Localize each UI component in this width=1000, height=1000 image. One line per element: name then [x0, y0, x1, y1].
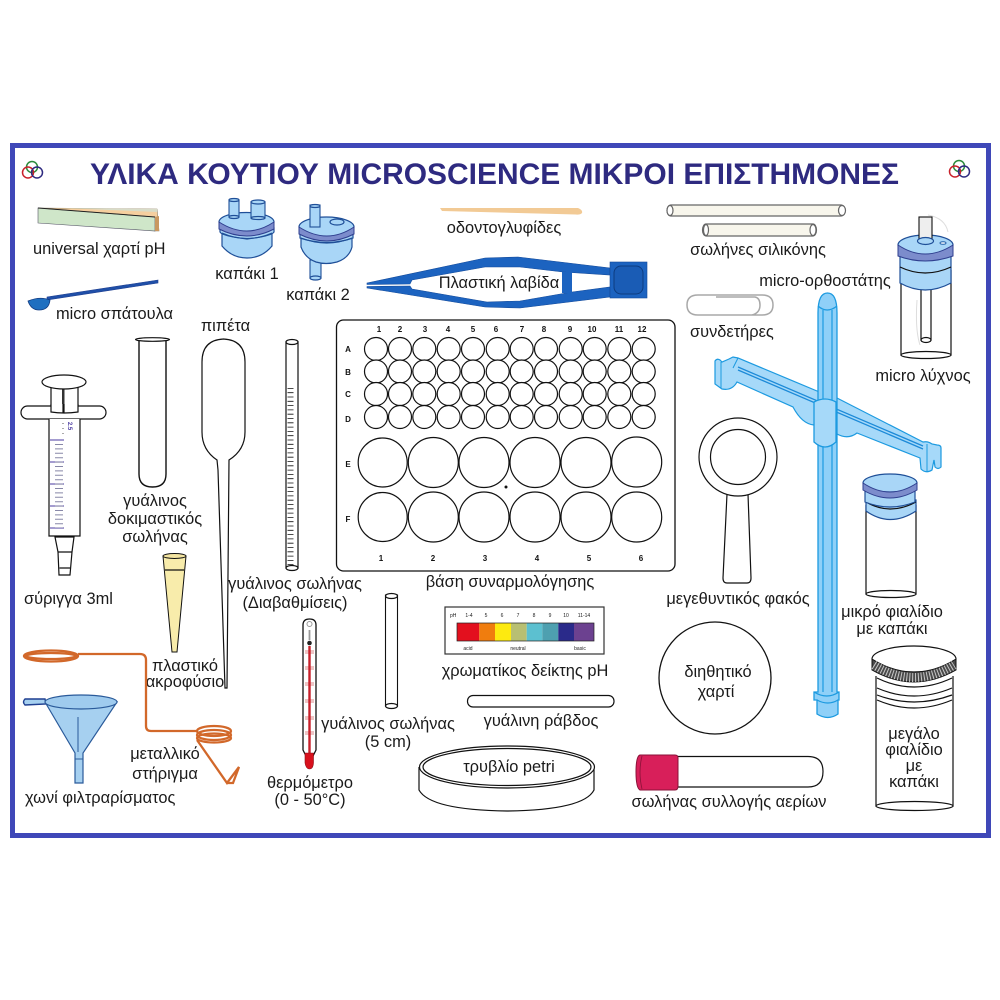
label: metal support: στήριγμα: [132, 765, 198, 783]
plate column numbers: 2: [398, 325, 403, 334]
icon: 5 cm glass tube: [386, 594, 398, 708]
icon: petri dish: [419, 746, 594, 811]
panel: blue frame: [12, 146, 988, 836]
plate bottom numbers: 1: [379, 554, 384, 563]
plate: assembly base: [336, 320, 675, 571]
icon: thermometer: [303, 619, 316, 769]
icon: magnifying glass: [699, 418, 777, 583]
icon: metal support wire: [24, 650, 239, 783]
pH scale words: [463, 646, 586, 652]
label: test tube: [108, 492, 202, 546]
icon: silicone tubes: [667, 205, 846, 236]
icon: plastic tip: [163, 554, 186, 652]
plate bottom numbers: 3: [483, 554, 488, 563]
label: large vial: μεγάλο: [888, 725, 940, 743]
plate bottom numbers: 6: [639, 554, 644, 563]
plate column numbers: 6: [494, 325, 499, 334]
label: pH indicator: χρωματίκος δείκτης pH: [442, 662, 608, 680]
plate row letters: E: [345, 460, 351, 469]
label: thermometer: (0 - 50°C): [274, 791, 346, 809]
icon: plastic tweezers: [367, 257, 647, 308]
plate row letters: C: [345, 390, 351, 399]
plate column numbers: 1: [377, 325, 382, 334]
plate row letters: D: [345, 415, 351, 424]
plate large wells: [358, 437, 662, 542]
label: metal support: [130, 745, 200, 783]
label: plastic tip: ακροφύσιο: [146, 673, 224, 691]
pH scale numbers: 1-4: [465, 613, 473, 619]
plate column numbers: [377, 325, 647, 334]
label: toothpicks: οδοντογλυφίδες: [447, 219, 561, 237]
plate row letters: B: [345, 368, 351, 377]
pH scale numbers: 9: [549, 613, 552, 619]
label: syringe: σύριγγα 3ml: [24, 590, 113, 608]
plate column numbers: 5: [471, 325, 476, 334]
label: assembly base: βάση συναρμολόγησης: [426, 573, 594, 591]
plate column numbers: 7: [520, 325, 525, 334]
icon: logo right: [950, 160, 970, 177]
pH scale numbers: 5: [485, 613, 488, 619]
label: test tube: γυάλινος: [123, 492, 187, 510]
label: plastic tip: [146, 657, 224, 691]
label: large vial: καπάκι: [889, 773, 939, 791]
plate bottom numbers: 5: [587, 554, 592, 563]
label: graduated tube: [228, 575, 362, 612]
label: 5 cm glass tube: [321, 715, 455, 751]
label: filter paper: διηθητικό: [684, 663, 752, 681]
label: filter paper: [684, 663, 752, 701]
plate row letters: F: [346, 515, 351, 524]
plate column numbers: 12: [638, 325, 647, 334]
plate column numbers: 3: [423, 325, 428, 334]
icon: paper clip: [687, 295, 773, 315]
label: micro burner: micro λύχνος: [875, 367, 971, 385]
label: small vial: μικρό φιαλίδιο: [841, 603, 943, 621]
label: large vial: [885, 725, 943, 791]
icon: small vial: [863, 474, 917, 598]
icon: funnel: [24, 695, 117, 783]
icon: large vial: [872, 646, 956, 810]
pH scale numbers: 10: [563, 613, 569, 619]
icon: gas collection tube: [636, 755, 823, 790]
pH scale numbers: [450, 613, 590, 619]
label: small vial: [841, 603, 943, 638]
plate row letters: A: [345, 345, 351, 354]
label: magnifying glass: μεγεθυντικός φακός: [666, 590, 810, 608]
title: ΥΛΙΚΑ ΚΟΥΤΙΟΥ MICROSCIENCE ΜΙΚΡΟΙ ΕΠΙΣΤΗΜΟΝΕΣ: [90, 158, 899, 191]
label: plastic tip: πλαστικό: [152, 657, 218, 675]
icon: micro spatula: [28, 280, 158, 310]
label: small vial: με καπάκι: [856, 620, 928, 638]
plate bottom numbers: 2: [431, 554, 436, 563]
label: gas collection tube: σωλήνας συλλογής αερίων: [632, 793, 826, 811]
pH scale words: neutral: [510, 646, 526, 652]
label: universal pH paper: universal χαρτί pH: [33, 240, 166, 258]
label: paper clips: συνδετήρες: [690, 323, 774, 341]
label: thermometer: [267, 774, 353, 809]
icon: logo left: [22, 162, 42, 178]
plate column numbers: 10: [588, 325, 597, 334]
icon: pipette: [202, 339, 245, 688]
label: test tube: δοκιμαστικός: [108, 510, 202, 528]
plate row letters: [345, 345, 351, 524]
icon: cap 1: [219, 198, 274, 258]
label: glass rod: γυάλινη ράβδος: [484, 712, 598, 730]
plate column numbers: 4: [446, 325, 451, 334]
label: graduated tube: γυάλινος σωλήνας: [228, 575, 362, 593]
chart: pH colour indicator: [445, 607, 604, 654]
plate column numbers: 9: [568, 325, 573, 334]
label: 5 cm glass tube: (5 cm): [365, 733, 411, 751]
label: cap 1: καπάκι 1: [215, 265, 279, 283]
label: plastic tweezers: Πλαστική λαβίδα: [439, 274, 559, 292]
icon: micro burner: [898, 215, 953, 358]
label: graduated tube: (Διαβαθμίσεις): [242, 594, 348, 612]
icon: filter paper: [659, 622, 771, 734]
icon: stand: [715, 293, 941, 718]
pH scale numbers: 8: [533, 613, 536, 619]
plate column numbers: 11: [615, 325, 624, 334]
icon: test tube rim: [136, 338, 170, 341]
plate bottom numbers: [379, 554, 644, 563]
icon: graduated glass tube: [286, 340, 298, 570]
icon: toothpick: [440, 208, 582, 215]
pH scale words: basic: [574, 646, 586, 652]
plate column numbers: 8: [542, 325, 547, 334]
plate bottom numbers: 4: [535, 554, 540, 563]
label: thermometer: θερμόμετρο: [267, 774, 353, 792]
icon: cap 2: [299, 204, 354, 280]
pH scale numbers: 7: [517, 613, 520, 619]
label: silicone tubes: σωλήνες σιλικόνης: [690, 241, 826, 259]
label: micro spatula: micro σπάτουλα: [56, 305, 173, 323]
icon: glass rod: [468, 696, 614, 707]
pH scale numbers: 6: [501, 613, 504, 619]
label: filter paper: χαρτί: [698, 683, 735, 701]
label: petri dish: τρυβλίο petri: [463, 758, 555, 776]
label: micro stand: micro-ορθοστάτης: [759, 272, 891, 290]
label: large vial: φιαλίδιο: [885, 741, 943, 759]
label: pipette title: πιπέτα: [201, 317, 250, 335]
pH scale words: acid: [463, 646, 473, 652]
pH scale numbers: pH: [450, 613, 457, 619]
label: test tube: σωλήνας: [122, 528, 188, 546]
icon: universal pH paper: [38, 208, 159, 231]
label: cap 2: καπάκι 2: [286, 286, 350, 304]
label: large vial: με: [906, 757, 922, 775]
label: 5 cm glass tube: γυάλινος σωλήνας: [321, 715, 455, 733]
icon: glass test tube: [139, 340, 166, 487]
plate small wells: [364, 338, 655, 428]
pH scale numbers: 11-14: [578, 613, 590, 619]
syringe volume mark: 2.5: [66, 422, 72, 431]
label: metal support: μεταλλικό: [130, 745, 200, 763]
label: funnel: χωνί φιλτραρίσματος: [25, 789, 175, 807]
icon: syringe: [21, 375, 106, 575]
